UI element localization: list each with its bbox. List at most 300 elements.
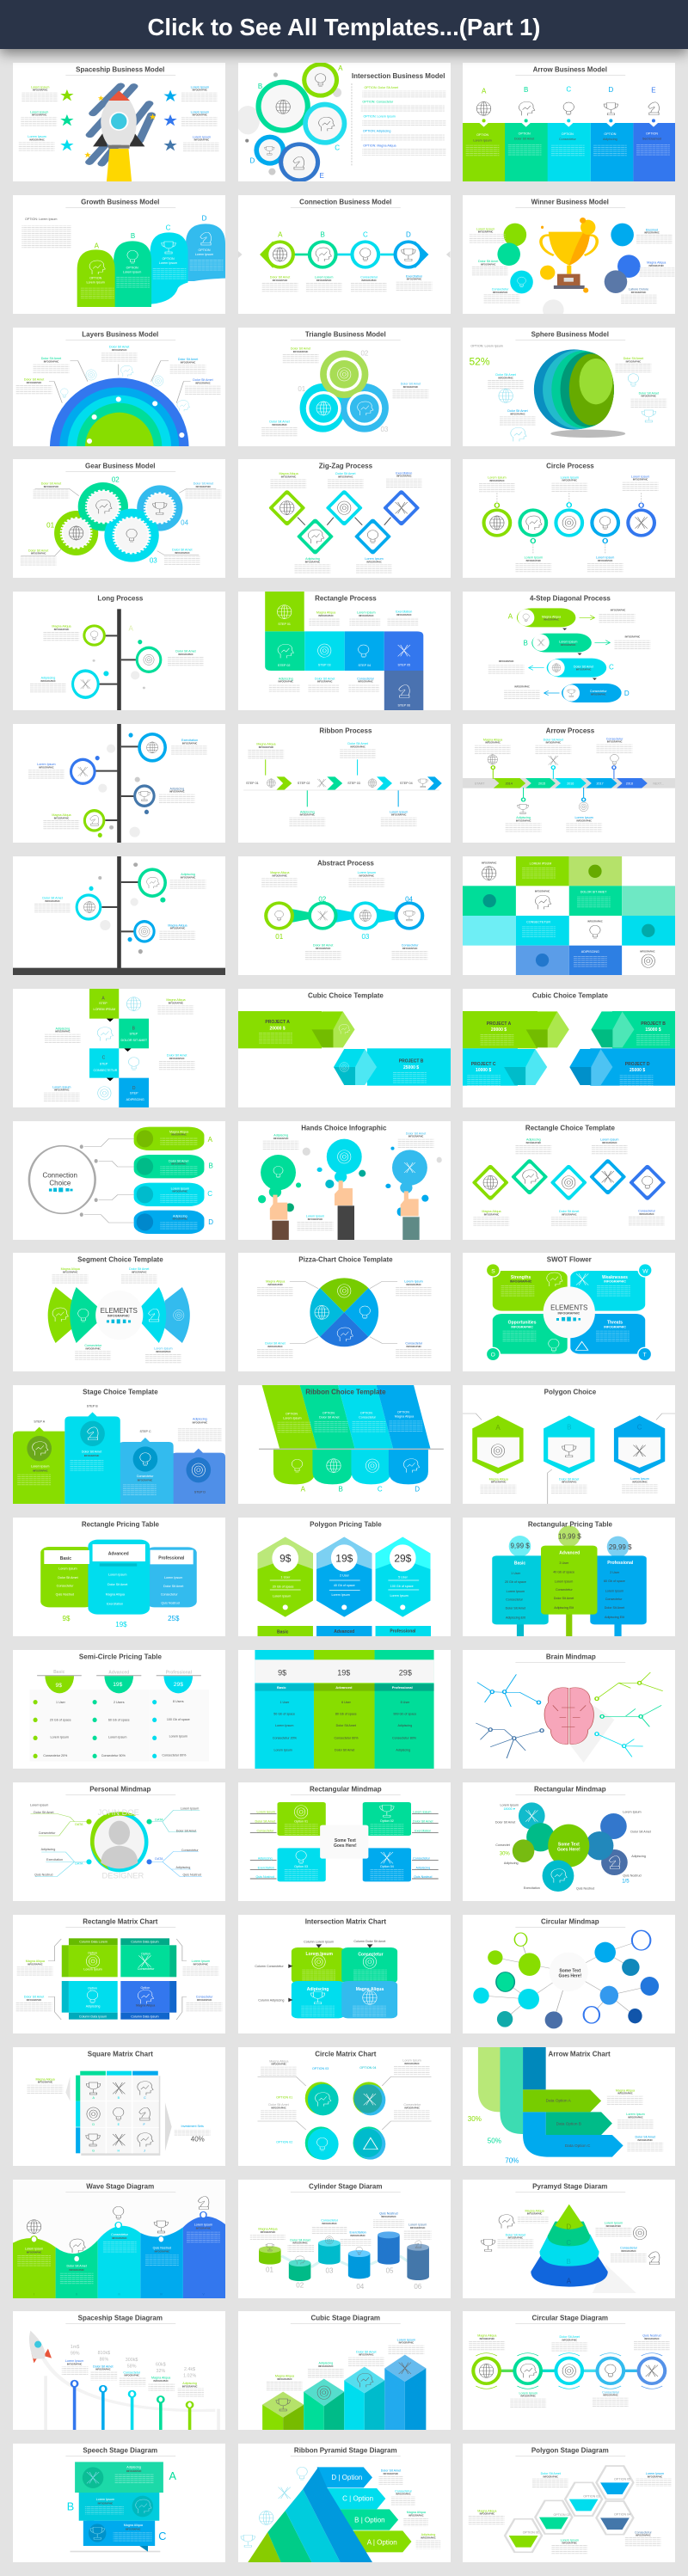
center text: Goes Here! bbox=[559, 1973, 582, 1978]
diagram: linked rings: 04 bbox=[405, 896, 414, 904]
text blocks: Column Data Lorem bbox=[79, 1941, 108, 1944]
labels: E bbox=[118, 2123, 120, 2126]
heading: Cubic Stage Diagram bbox=[311, 2315, 380, 2322]
text labels: Dolor Sit Amet bbox=[34, 1811, 53, 1814]
text: INFOGRAPHIC bbox=[98, 2503, 113, 2505]
text blocks: 86% bbox=[100, 2358, 109, 2363]
diagram: arrow timeline bbox=[463, 754, 675, 814]
diagram: circle and pills: B bbox=[208, 1162, 213, 1170]
text: INFOGRAPHIC bbox=[396, 2493, 411, 2496]
text: Column Lorem Ipsum bbox=[304, 1941, 334, 1944]
text blocks: INFOGRAPHIC bbox=[576, 669, 592, 672]
table text: 80 Gb of space bbox=[335, 1712, 357, 1715]
text blocks: INFOGRAPHIC bbox=[381, 2216, 396, 2218]
text blocks: 810k$ bbox=[98, 2351, 110, 2356]
step labels and text blocks: D bbox=[132, 1086, 136, 1091]
text blocks: INFOGRAPHIC bbox=[499, 660, 514, 663]
text: Goes Here! bbox=[334, 1843, 357, 1849]
option list: OPTION: Magna Aliqua bbox=[363, 144, 396, 147]
diagram: slanted ribbons: B bbox=[338, 1486, 343, 1493]
panel: Gear Business Model bbox=[13, 459, 225, 578]
heading: Cubic Choice Template bbox=[532, 992, 608, 1000]
heading: Arrow Process bbox=[546, 727, 595, 735]
text blocks: INFOGRAPHIC bbox=[625, 635, 640, 638]
text: Lorem Ipsum bbox=[501, 1804, 519, 1807]
text blocks bbox=[473, 1138, 665, 1226]
panel: tile matrix bbox=[463, 856, 675, 975]
text: INFOGRAPHIC bbox=[558, 1312, 580, 1316]
pricing text: 19,99 $ bbox=[558, 1532, 581, 1540]
text blocks: Magna Aliqua bbox=[275, 2375, 294, 2378]
diagram: columns: A bbox=[482, 87, 487, 95]
text blocks: INFOGRAPHIC bbox=[194, 1963, 208, 1966]
text blocks: INFOGRAPHIC bbox=[169, 791, 185, 794]
text blocks: INFOGRAPHIC bbox=[648, 2475, 662, 2478]
diagram: hexagons bbox=[505, 2466, 633, 2552]
panel: Winner Business Model bbox=[463, 195, 675, 314]
text blocks: Column Data Ipsum bbox=[131, 1940, 159, 1943]
step labels and text blocks: INFOGRAPHIC bbox=[317, 681, 333, 684]
panel: Rectangle Matrix Chart bbox=[13, 1915, 225, 2033]
text blocks: INFOGRAPHIC bbox=[181, 876, 196, 879]
text blocks: INFOGRAPHIC bbox=[544, 619, 559, 622]
heading: Triangle Business Model bbox=[305, 331, 386, 339]
panel: Pyramyd Stage Diaram bbox=[463, 2180, 675, 2298]
diagram: rings: C bbox=[335, 144, 340, 151]
project text: 15000 $ bbox=[645, 1027, 661, 1033]
step labels and text blocks: STEP bbox=[100, 1063, 108, 1066]
table text: Adipiscing bbox=[396, 1749, 410, 1752]
step labels and text blocks: STEP 03 bbox=[318, 664, 331, 667]
pricing text: 2 User bbox=[340, 1574, 350, 1578]
diagram: node network bbox=[473, 1930, 659, 2028]
text blocks: Lorem Ipsum bbox=[192, 1960, 210, 1963]
step labels and text blocks: A bbox=[101, 996, 105, 1001]
table text: 6 User bbox=[341, 1701, 352, 1704]
diagram: rings: B bbox=[258, 83, 262, 90]
text blocks: Magna Aliqua bbox=[616, 2088, 635, 2092]
text blocks: Lorem Ipsum bbox=[559, 641, 577, 644]
pricing text: Dolor Sit Amet bbox=[506, 1607, 525, 1610]
diagram: three circles bbox=[298, 350, 389, 433]
text blocks: INFOGRAPHIC bbox=[485, 742, 501, 745]
text: Lorem Ipsum bbox=[623, 1810, 642, 1813]
text blocks: OPTION 01 bbox=[276, 2095, 292, 2099]
text blocks: INFOGRAPHIC bbox=[366, 561, 382, 563]
text: Dolor Sit Amet bbox=[82, 1450, 101, 1453]
text blocks: INFOGRAPHIC bbox=[267, 1346, 283, 1348]
text blocks bbox=[261, 2059, 430, 2144]
labels: C bbox=[144, 2096, 146, 2100]
step labels and text blocks: STEP 02 bbox=[278, 664, 290, 667]
diagram: slanted ribbons: C bbox=[378, 1486, 383, 1493]
step labels and text blocks: STEP bbox=[99, 1002, 108, 1005]
labels: B bbox=[118, 2096, 120, 2100]
text blocks: INFOGRAPHIC bbox=[527, 2213, 543, 2216]
text blocks: Magna Aliqua bbox=[269, 2059, 288, 2063]
column text: Lorem Ipsum bbox=[473, 138, 492, 142]
hexagon fills: OPTION 02 bbox=[553, 2513, 570, 2517]
diagram: ribbon pyramid bbox=[241, 2467, 411, 2562]
heading: Hands Choice Infographic bbox=[301, 1125, 387, 1132]
step labels and text blocks: B bbox=[132, 1026, 136, 1031]
pricing text: 20 Gb of space bbox=[50, 1719, 71, 1722]
text blocks: Adipiscing bbox=[318, 2362, 333, 2365]
text blocks: Consectetur bbox=[492, 288, 509, 291]
text labels: Consectetur bbox=[181, 1849, 199, 1852]
diagram: ribbon: STEP 04 bbox=[400, 782, 413, 785]
text: STEP D bbox=[194, 1491, 206, 1494]
project text: 20000 $ bbox=[270, 1026, 286, 1031]
text: INFOGRAPHIC bbox=[33, 1469, 48, 1472]
text blocks: Dolor Sit Amet bbox=[268, 2103, 289, 2107]
text blocks: Dolor Sit Amet bbox=[265, 1342, 286, 1346]
pricing text: Basic bbox=[60, 1556, 71, 1561]
text blocks: INFOGRAPHIC bbox=[292, 2242, 308, 2245]
diagram: coloured tiles bbox=[463, 856, 675, 975]
heading: Polygon Stage Diagram bbox=[531, 2447, 609, 2455]
diagram: hexagons bbox=[463, 1414, 675, 1504]
text bbox=[331, 2469, 440, 2548]
text: Adipiscing bbox=[258, 1856, 273, 1860]
panel: Growth Business Model bbox=[13, 195, 225, 314]
diagram: gears bbox=[54, 482, 182, 562]
panel: Brain Mindmap bbox=[463, 1650, 675, 1769]
step labels and text blocks: Lorem Ipsum bbox=[357, 611, 375, 615]
diagram: ribbon: STEP 01 bbox=[246, 782, 259, 785]
text blocks: INFOGRAPHIC bbox=[273, 1138, 289, 1140]
text blocks: INFOGRAPHIC bbox=[489, 480, 505, 482]
text: B bbox=[67, 2500, 74, 2512]
text blocks: INFOGRAPHIC bbox=[621, 2250, 636, 2253]
diagram: arches: B bbox=[131, 232, 135, 240]
text: Lorem Ipsum bbox=[171, 1187, 189, 1190]
pricing text: 1 User bbox=[511, 1572, 521, 1575]
pricing text: Consectetur 60% bbox=[162, 1753, 187, 1757]
text blocks bbox=[262, 274, 433, 292]
table text: 1 User bbox=[280, 1701, 290, 1704]
panel: Cubic Choice Template two bbox=[238, 989, 451, 1107]
text: Consectetur bbox=[395, 2489, 412, 2493]
diagram: linked rings: 02 bbox=[318, 896, 327, 904]
text blocks: 60k$ bbox=[156, 2362, 166, 2367]
pricing text: 29$ bbox=[174, 1682, 183, 1688]
heading: Cubic Choice Template bbox=[308, 992, 384, 1000]
diagram: connected rings bbox=[238, 230, 450, 269]
column text: OPTION bbox=[646, 132, 658, 136]
heading: Stage Choice Template bbox=[83, 1389, 158, 1396]
heading: Spaceship Stage Diagram bbox=[78, 2315, 163, 2322]
diagram: columns: B bbox=[524, 86, 528, 94]
panel: step column bbox=[13, 989, 225, 1107]
text blocks: Dolor Sit Amet bbox=[42, 897, 63, 900]
text: Quis Nostrud bbox=[414, 1875, 432, 1879]
text blocks: Adipiscing bbox=[305, 557, 320, 561]
diagram: rocket and pins bbox=[29, 2331, 220, 2431]
text blocks: Dolor Sit Amet bbox=[506, 2233, 525, 2236]
pricing text: 8 Users bbox=[173, 1700, 184, 1703]
text blocks bbox=[21, 482, 221, 566]
text blocks: Exercitation bbox=[406, 274, 422, 278]
heading: Ribbon Choice Template bbox=[305, 1389, 386, 1396]
diagram: layered cone: D bbox=[566, 2223, 571, 2230]
text: Weaknesses bbox=[602, 1275, 628, 1280]
panel: Personal Mindmap bbox=[13, 1782, 225, 1901]
panel: Rectangular Pricing Table bbox=[463, 1518, 675, 1636]
pricing text: 9$ bbox=[280, 1553, 292, 1565]
text: INFOGRAPHIC bbox=[421, 2536, 436, 2539]
heading: Segment Choice Template bbox=[77, 1256, 163, 1264]
panel: Polygon Pricing Table bbox=[238, 1518, 451, 1636]
table text: Adipiscing bbox=[397, 1724, 412, 1727]
pricing text: Lorem Ipsum bbox=[273, 1594, 291, 1598]
text blocks: INFOGRAPHIC bbox=[649, 265, 664, 267]
column text: INFOGRAPHIC bbox=[112, 2237, 127, 2240]
panel: Polygon Stage Diagram bbox=[463, 2444, 675, 2562]
text blocks: INFOGRAPHIC bbox=[272, 424, 287, 426]
text blocks bbox=[270, 471, 422, 573]
heading: Abstract Process bbox=[317, 860, 374, 868]
text blocks: INFOGRAPHIC bbox=[350, 745, 366, 748]
text blocks: INFOGRAPHIC bbox=[633, 479, 648, 481]
text blocks: INFOGRAPHIC bbox=[272, 2064, 286, 2066]
text blocks: INFOGRAPHIC bbox=[516, 819, 531, 822]
text blocks: Lorem Ipsum bbox=[159, 261, 177, 265]
table text: Lorem Ipsum bbox=[273, 1749, 292, 1752]
panel: Speech Stage Diagram bbox=[13, 2444, 225, 2562]
text blocks: Lorem Ipsum bbox=[631, 475, 649, 478]
step labels and text blocks: LOREM IPSUM bbox=[94, 1008, 115, 1011]
diagram: pills: B bbox=[523, 640, 528, 647]
pricing text: Advanced bbox=[108, 1671, 129, 1676]
text blocks: Lorem Ipsum bbox=[358, 871, 376, 874]
text: Choice bbox=[49, 1179, 71, 1187]
pricing text: 5 User bbox=[398, 1575, 408, 1579]
diagram: hexagons: B bbox=[567, 1423, 571, 1431]
pricing text: Lorem Ipsum bbox=[58, 1567, 77, 1571]
diagram: pills: A bbox=[508, 612, 513, 620]
diagram: arrow timeline: 2018 bbox=[626, 782, 633, 785]
diagram: columns bbox=[463, 86, 675, 181]
panel: column pricing table bbox=[238, 1650, 451, 1769]
table text: 19$ bbox=[337, 1668, 350, 1677]
text blocks: Dolor Sit Amet bbox=[347, 742, 368, 745]
text blocks: Lorem Ipsum bbox=[37, 763, 56, 766]
panel: Rectangular Mindmap circles bbox=[463, 1782, 675, 1901]
panel: Connection Choice bbox=[13, 1121, 225, 1240]
diagram: connected rings: B bbox=[321, 230, 325, 238]
pricing text: Professional bbox=[607, 1561, 634, 1566]
text blocks: Lorem Ipsum bbox=[30, 110, 48, 113]
heading: Intersection Matrix Chart bbox=[305, 1918, 386, 1926]
pricing text: Professional bbox=[166, 1670, 193, 1675]
gear icons: 04 bbox=[181, 519, 189, 527]
project text: PROJECT A bbox=[487, 1021, 512, 1027]
text blocks: Dolor Sit Amet bbox=[270, 276, 290, 279]
text: INFOGRAPHIC bbox=[171, 1134, 187, 1137]
diagram: linked rings bbox=[264, 896, 424, 941]
tile labels: INFOGRAPHIC bbox=[640, 950, 655, 953]
text blocks: INFOGRAPHIC bbox=[181, 361, 195, 364]
text: Lorem Ipsum bbox=[306, 1952, 333, 1957]
text blocks: Column Data Ipsum bbox=[131, 2015, 159, 2019]
heading: Pizza-Chart Choice Template bbox=[298, 1256, 393, 1264]
panel: Cylinder Stage Diaram bbox=[238, 2180, 451, 2298]
text blocks: INFOGRAPHIC bbox=[399, 2342, 414, 2345]
text blocks: INFOGRAPHIC bbox=[636, 2535, 651, 2537]
text: 1/5 bbox=[622, 1879, 630, 1884]
text blocks: INFOGRAPHIC bbox=[350, 2235, 366, 2237]
pricing text: Lorem Ipsum bbox=[169, 1735, 187, 1739]
heading: Connection Business Model bbox=[299, 199, 391, 206]
diagram: portrait and branches bbox=[30, 1810, 202, 1877]
tile labels: CONSECTETUR bbox=[526, 920, 550, 923]
table text: 29$ bbox=[399, 1668, 412, 1677]
text blocks: INFOGRAPHIC bbox=[293, 351, 309, 353]
text: Column Consectetur bbox=[255, 1965, 284, 1968]
panel: Cubic Stage Diagram bbox=[238, 2311, 451, 2430]
text blocks: INFOGRAPHIC bbox=[396, 475, 412, 478]
text blocks: Lorem Ipsum bbox=[596, 556, 614, 560]
text blocks: Magna Aliqua bbox=[477, 2509, 496, 2512]
text blocks: Consectetur bbox=[360, 276, 378, 279]
text blocks: INFOGRAPHIC bbox=[194, 139, 209, 142]
hexagon fills: OPTION 03 bbox=[583, 2495, 599, 2499]
pricing text: 9$ bbox=[56, 1683, 62, 1689]
step labels and text blocks bbox=[44, 996, 195, 1101]
panel: Rectangle Process bbox=[238, 592, 451, 710]
table text: Dolor Sit Amet bbox=[336, 1724, 356, 1727]
pricing text: 29,99 $ bbox=[609, 1543, 632, 1551]
text blocks bbox=[468, 2088, 663, 2165]
pricing text: 25$ bbox=[168, 1615, 180, 1622]
diagram: four tiles and arrows bbox=[250, 1802, 439, 1881]
pricing text: 1 User bbox=[281, 1576, 291, 1579]
text: Consectetur bbox=[137, 1475, 154, 1478]
text blocks bbox=[62, 2345, 204, 2397]
step labels and text blocks: ADIPISCING bbox=[126, 1098, 144, 1101]
text blocks: INFOGRAPHIC bbox=[316, 279, 332, 282]
tile labels: INFOGRAPHIC bbox=[482, 862, 497, 864]
text blocks bbox=[263, 1132, 434, 1231]
diagram: SWOT petals bbox=[486, 1263, 653, 1361]
pricing text: Consectetur 20% bbox=[43, 1754, 68, 1757]
pricing text: 1 User bbox=[56, 1701, 66, 1704]
pricing text: 20 Gb of space bbox=[505, 1580, 526, 1584]
diagram: timeline bbox=[71, 609, 162, 710]
diagram: arrow timeline: 2014 bbox=[506, 782, 513, 785]
text blocks: INFOGRAPHIC bbox=[153, 2380, 169, 2383]
text labels: DATA bbox=[155, 1818, 163, 1821]
text blocks: Adipiscing bbox=[182, 2382, 197, 2385]
step labels and text blocks: INFOGRAPHIC bbox=[318, 615, 334, 617]
text blocks: INFOGRAPHIC bbox=[644, 232, 660, 235]
panel: Cubic Choice Template four bbox=[463, 989, 675, 1107]
panel: Rectangle Choice Template bbox=[463, 1121, 675, 1240]
diagram: cylinders: 05 bbox=[386, 2267, 394, 2275]
text blocks: Adipiscing bbox=[181, 873, 195, 876]
text: Column Dolor Sit Amet bbox=[353, 1940, 385, 1943]
diagram: timeline: A bbox=[129, 625, 134, 633]
diagram: three circles: 03 bbox=[380, 426, 389, 433]
text blocks: INFOGRAPHIC bbox=[40, 680, 56, 683]
pricing text: 20 Gb of space bbox=[273, 1585, 294, 1589]
text: A | Option bbox=[367, 2538, 397, 2546]
step labels and text blocks: INFOGRAPHIC bbox=[169, 1058, 185, 1060]
text: Opportunities bbox=[508, 1321, 537, 1326]
labels: A bbox=[93, 2096, 95, 2100]
step labels and text blocks: STEP 06 bbox=[397, 703, 410, 707]
text blocks: INFOGRAPHIC bbox=[407, 279, 422, 281]
diagram: arrow timeline: START bbox=[475, 782, 485, 785]
text bbox=[67, 2465, 177, 2542]
text: O bbox=[491, 1352, 495, 1359]
text blocks: INFOGRAPHIC bbox=[359, 2354, 374, 2357]
heading: 4-Step Diagonal Process bbox=[530, 595, 611, 603]
column text: OPTION bbox=[519, 132, 531, 136]
text labels: Exercitation bbox=[46, 1858, 63, 1861]
text blocks: INFOGRAPHIC bbox=[359, 874, 374, 877]
diagram: trophy and circles bbox=[497, 218, 641, 320]
pricing text: Lorem Ipsum bbox=[507, 1590, 525, 1593]
option list bbox=[361, 86, 445, 156]
text blocks: Consectetur bbox=[405, 1342, 422, 1346]
heading: Rectangle Pricing Table bbox=[82, 1521, 160, 1529]
text blocks: Lorem Ipsum bbox=[561, 2538, 579, 2542]
text: Option 03 bbox=[294, 1865, 308, 1868]
text blocks: INFOGRAPHIC bbox=[544, 2475, 558, 2478]
diagram: three circles: 02 bbox=[360, 350, 369, 358]
diagram: slanted ribbons: A bbox=[301, 1486, 306, 1493]
ribbon text: OPTION bbox=[360, 1411, 372, 1414]
column text: Lorem Ipsum bbox=[194, 2223, 212, 2227]
heading: Intersection Business Model bbox=[352, 72, 445, 80]
diagram: connected rings: C bbox=[363, 230, 368, 238]
step labels and text blocks: STEP 04 bbox=[358, 664, 371, 667]
text blocks: INFOGRAPHIC bbox=[305, 561, 320, 563]
text blocks: Quis Nostrud bbox=[379, 2212, 398, 2216]
table text: Consectetur 20% bbox=[273, 1736, 298, 1739]
heading: Circular Stage Diagram bbox=[531, 2315, 608, 2322]
text blocks: Lorem Ipsum bbox=[306, 1215, 324, 1218]
text: Quis Nostrud bbox=[576, 1886, 594, 1890]
diagram: rings bbox=[482, 493, 656, 553]
text blocks: INFOGRAPHIC bbox=[170, 928, 185, 930]
diagram: overlapping circles bbox=[258, 2076, 431, 2160]
text blocks: INFOGRAPHIC bbox=[410, 2227, 426, 2229]
pricing text: Consectetur 50% bbox=[101, 1754, 126, 1757]
heading: Rectangular Pricing Table bbox=[528, 1521, 613, 1529]
step labels and text blocks: INFOGRAPHIC bbox=[358, 681, 373, 684]
step labels and text blocks: CONSECTETUR bbox=[94, 1069, 118, 1072]
text blocks bbox=[22, 218, 223, 299]
diagram: ribbon: STEP 03 bbox=[347, 782, 360, 785]
text blocks: INFOGRAPHIC bbox=[29, 138, 45, 141]
diagram: connected rings: A bbox=[278, 230, 283, 238]
heading: Layers Business Model bbox=[82, 331, 158, 339]
text blocks: Dolor Sit Amet bbox=[194, 482, 213, 486]
heading: Growth Business Model bbox=[81, 199, 159, 206]
step labels and text blocks: INFOGRAPHIC bbox=[359, 615, 374, 617]
panel: Ribbon Pyramid Stage Diagram bbox=[238, 2444, 451, 2562]
text blocks bbox=[261, 871, 427, 960]
text blocks: Adipiscing bbox=[300, 810, 315, 813]
diagram: bent arrows bbox=[478, 2047, 624, 2157]
pricing text: Advanced bbox=[334, 1629, 354, 1635]
text labels: Lorem Ipsum bbox=[30, 1804, 48, 1807]
text blocks: Option bbox=[141, 1952, 150, 1955]
text blocks: Magna Aliqua bbox=[489, 1477, 508, 1481]
